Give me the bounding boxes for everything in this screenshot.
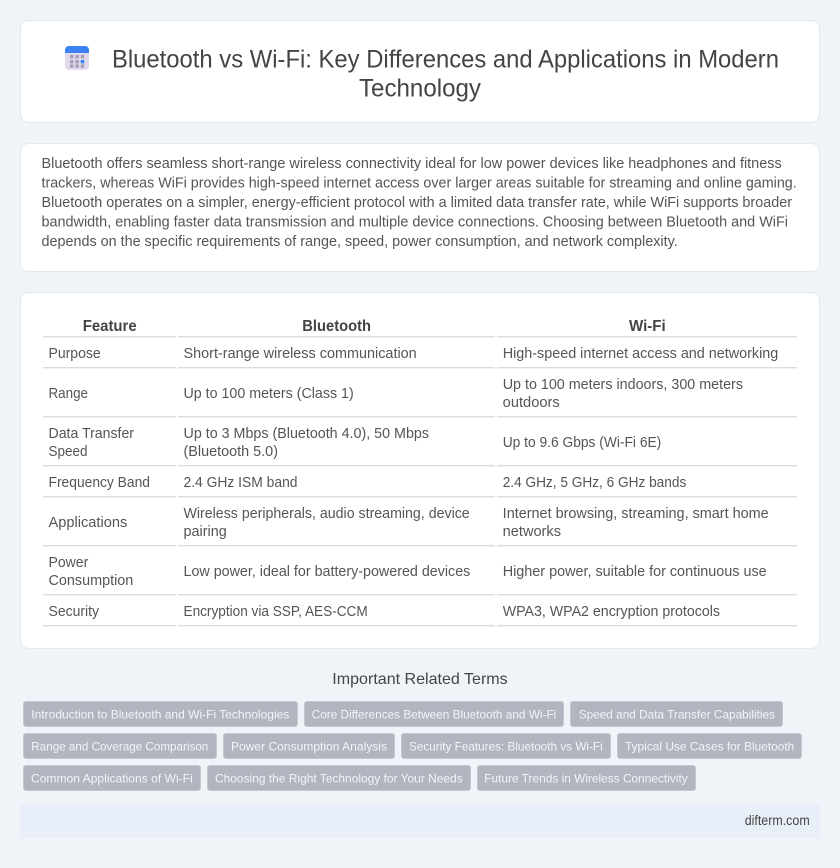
row: range: Up to 100 meters indoors, 300 meters bbox=[503, 377, 743, 393]
text block: summary paragraph: depends on the specific requirements of range, speed, power consumption, and network complexity. bbox=[42, 234, 678, 250]
row: data transfer speed: Data Transfer bbox=[48, 426, 134, 442]
table header: Feature bbox=[83, 318, 137, 335]
panel: comparison table bbox=[20, 292, 820, 648]
row: purpose: High-speed internet access and networking bbox=[503, 346, 778, 362]
row: data transfer speed: Speed bbox=[48, 444, 88, 460]
related term chips: Range and Coverage Comparison bbox=[31, 739, 208, 753]
related term chips: Choosing the Right Technology for Your Needs bbox=[215, 771, 463, 785]
related term chips: Introduction to Bluetooth and Wi-Fi Technologies bbox=[31, 707, 289, 721]
row: frequency band: 2.4 GHz, 5 GHz, 6 GHz bands bbox=[503, 475, 686, 491]
table header: Wi-Fi bbox=[629, 318, 666, 335]
row: applications: pairing bbox=[184, 524, 227, 540]
row: applications bbox=[48, 506, 769, 540]
title bbox=[112, 46, 779, 102]
related term chips: Future Trends in Wireless Connectivity bbox=[484, 771, 688, 785]
row: applications: Wireless peripherals, audio streaming, device bbox=[184, 506, 470, 522]
row: applications: networks bbox=[503, 524, 561, 540]
table header: Bluetooth bbox=[302, 318, 371, 335]
heading: important related terms: Important Related Terms bbox=[332, 671, 508, 688]
text block: summary paragraph: bandwidth, enabling faster data transmission and multiple device connections. Choosing between Bluetooth and WiFi bbox=[42, 214, 788, 230]
text block: summary paragraph: Bluetooth operates on a simpler, energy-efficient protocol with a limited data transfer rate, while WiFi supports broader bbox=[42, 195, 792, 211]
row: range: Range bbox=[48, 386, 88, 402]
title: Technology bbox=[359, 74, 481, 102]
related term chips: Security Features: Bluetooth vs Wi-Fi bbox=[409, 739, 603, 753]
row: frequency band: 2.4 GHz ISM band bbox=[184, 475, 298, 491]
row: security: Security bbox=[48, 604, 100, 620]
row: data transfer speed: (Bluetooth 5.0) bbox=[184, 444, 278, 460]
related term chips: Core Differences Between Bluetooth and Wi-Fi bbox=[312, 707, 556, 721]
row: power consumption: Consumption bbox=[48, 573, 133, 589]
row: power consumption: Power bbox=[48, 555, 88, 571]
row: purpose bbox=[48, 346, 778, 362]
row: frequency band: Frequency Band bbox=[48, 475, 150, 491]
row: power consumption: Higher power, suitable for continuous use bbox=[503, 564, 767, 580]
footer bbox=[20, 804, 820, 838]
row: range: Up to 100 meters (Class 1) bbox=[184, 386, 354, 402]
row: security bbox=[48, 604, 720, 620]
related term chips: Speed and Data Transfer Capabilities bbox=[579, 707, 775, 721]
row: power consumption bbox=[48, 555, 767, 589]
panel: header bbox=[20, 20, 820, 122]
row: data transfer speed bbox=[48, 426, 661, 460]
row: data transfer speed: Up to 3 Mbps (Bluetooth 4.0), 50 Mbps bbox=[184, 426, 429, 442]
row: security: WPA3, WPA2 encryption protocols bbox=[503, 604, 720, 620]
text block: summary paragraph: trackers, whereas WiFi provides high-speed internet access over larger areas suitable for streaming and online gaming. bbox=[42, 176, 797, 192]
related term chips: Typical Use Cases for Bluetooth bbox=[625, 739, 794, 753]
text block: summary paragraph: Bluetooth offers seamless short-range wireless connectivity ideal for low power devices like headphones and fitness bbox=[42, 156, 782, 172]
row: purpose: Purpose bbox=[48, 346, 101, 362]
text block: summary paragraph bbox=[42, 156, 797, 250]
footer: difterm.com bbox=[745, 813, 810, 828]
related term chips bbox=[24, 702, 802, 790]
row: frequency band bbox=[48, 475, 686, 491]
row: power consumption: Low power, ideal for battery-powered devices bbox=[184, 564, 470, 580]
row: applications: Internet browsing, streaming, smart home bbox=[503, 506, 769, 522]
row: range: outdoors bbox=[503, 395, 560, 411]
table header bbox=[83, 318, 666, 335]
related term chips: Common Applications of Wi-Fi bbox=[31, 771, 193, 785]
row: range bbox=[48, 377, 743, 411]
row: applications: Applications bbox=[48, 515, 127, 531]
row: data transfer speed: Up to 9.6 Gbps (Wi-Fi 6E) bbox=[503, 435, 661, 451]
icon: calendar bbox=[65, 46, 89, 70]
panel: summary bbox=[20, 144, 820, 272]
row: security: Encryption via SSP, AES-CCM bbox=[184, 604, 368, 620]
related term chips: Power Consumption Analysis bbox=[231, 739, 387, 753]
row: purpose: Short-range wireless communication bbox=[184, 346, 417, 362]
title: Bluetooth vs Wi-Fi: Key Differences and Applications in Modern bbox=[112, 46, 779, 74]
